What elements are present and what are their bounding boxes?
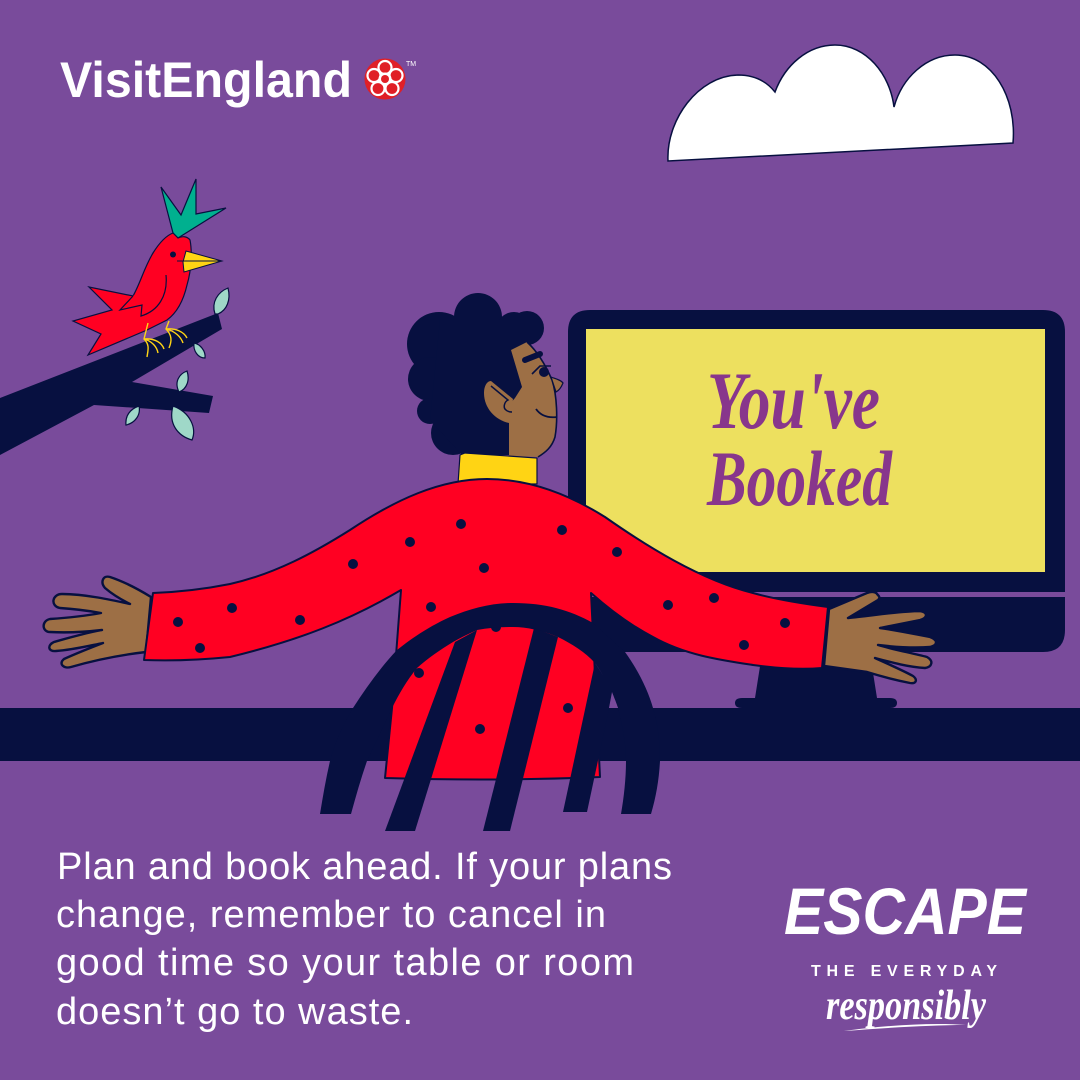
purple gap in chair	[609, 692, 618, 708]
monitor frame	[568, 310, 1065, 592]
ear	[484, 381, 513, 423]
Escape the Everyday Responsibly logo: ESCAPE	[784, 874, 1028, 948]
nose	[551, 377, 563, 392]
left hand	[44, 577, 151, 667]
body text: change, remember to cancel in	[56, 894, 606, 936]
cloud	[668, 45, 1013, 161]
bird beak	[183, 251, 222, 272]
bird	[73, 179, 226, 357]
icon: Tudor rose	[364, 58, 406, 100]
collar	[458, 453, 537, 484]
VisitEngland logo: VisitEngland	[60, 52, 352, 108]
Escape the Everyday Responsibly logo: responsibly	[826, 983, 986, 1029]
bird eye	[170, 252, 176, 258]
Escape the Everyday Responsibly logo: THE EVERYDAY	[811, 963, 997, 980]
tree branch	[0, 313, 222, 455]
body text: good time so your table or room	[56, 942, 634, 984]
body text: Plan and book ahead. If your plans	[57, 846, 672, 888]
screen message	[706, 355, 893, 522]
neck and face	[509, 342, 557, 457]
bird feet	[144, 321, 187, 357]
VisitEngland logo: TM	[406, 61, 416, 68]
bird crest	[161, 179, 226, 238]
body text	[56, 846, 672, 1033]
desk	[0, 708, 1080, 761]
chair back arc	[320, 603, 660, 814]
chair slats	[385, 630, 477, 831]
right hand	[824, 592, 936, 683]
Escape the Everyday Responsibly logo	[784, 874, 1028, 1031]
screen message: Booked	[706, 435, 893, 522]
leaves	[126, 288, 229, 440]
person	[44, 293, 936, 779]
monitor stand	[735, 660, 897, 708]
chair	[320, 603, 660, 831]
bird body	[73, 233, 191, 355]
body text: doesn’t go to waste.	[56, 991, 413, 1033]
eyebrow eye and smile	[525, 354, 557, 417]
hair	[407, 293, 544, 455]
bird wing	[120, 275, 166, 316]
computer monitor	[568, 310, 1065, 708]
screen message: You've	[707, 355, 880, 446]
monitor lower bar	[591, 597, 1065, 652]
sweater dots	[173, 519, 790, 734]
screen	[586, 329, 1045, 572]
red polka-dot sweater	[144, 479, 828, 779]
